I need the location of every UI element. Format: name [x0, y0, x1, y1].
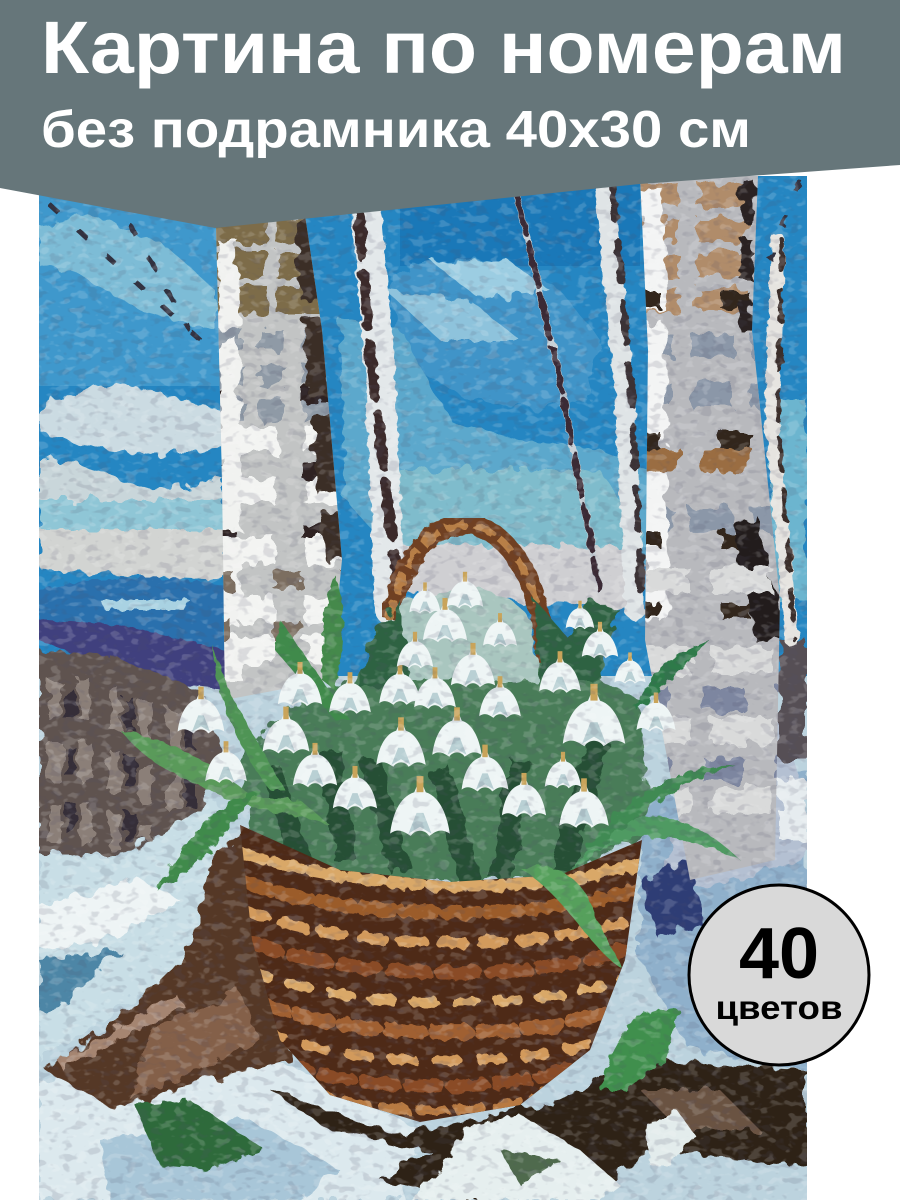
stump roots: [45, 830, 807, 1200]
painting base: [39, 676, 807, 1200]
distant forest: [39, 650, 225, 855]
title: Картина по номерам: [41, 6, 846, 89]
subtitle: без подрамника 40х30 см: [41, 101, 751, 159]
snowdrop flowers: [178, 572, 676, 836]
left birch trunk: [216, 218, 342, 698]
mountains: [39, 578, 225, 690]
header banner: [0, 0, 900, 228]
badge label: цветов: [716, 989, 842, 1026]
right birch trunk: [640, 176, 780, 880]
thin birch trunks: [358, 180, 795, 640]
badge number: 40: [739, 914, 819, 994]
paint texture: [39, 176, 807, 1200]
leaves: [122, 575, 740, 1170]
painting: [39, 176, 807, 1200]
basket: [230, 820, 650, 1130]
clouds: [39, 215, 807, 610]
foliage behind flowers: [240, 589, 650, 880]
snowdrops on ground: [410, 1108, 695, 1200]
sky: [39, 176, 807, 676]
snow on ground: [39, 640, 807, 1200]
basket handle: [390, 525, 545, 665]
small branches: [50, 180, 800, 340]
badge: 40 colours: [689, 885, 869, 1065]
